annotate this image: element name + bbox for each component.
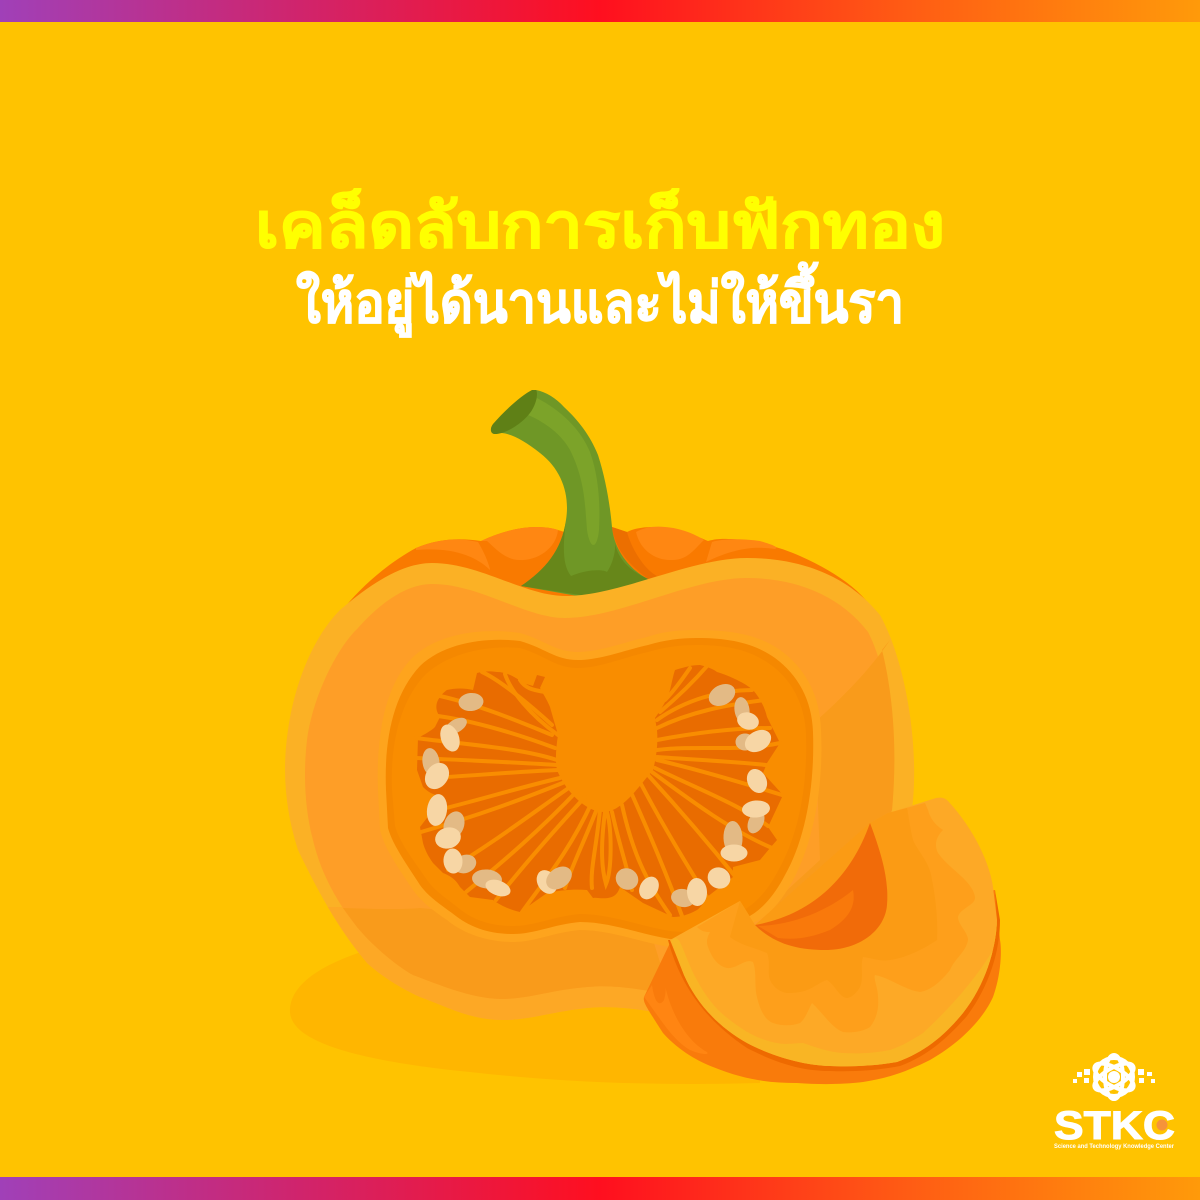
stem base shadow <box>521 520 648 598</box>
stem highlight <box>528 398 599 545</box>
logo: data squares <box>1073 1069 1155 1083</box>
flesh lower shade <box>343 908 670 999</box>
stem cut end <box>491 390 537 434</box>
cavity light ring <box>378 630 821 948</box>
seeds <box>420 680 775 909</box>
logo: orange dot <box>1156 1120 1168 1130</box>
pumpkin slice <box>644 798 1001 1084</box>
slice dark edge <box>668 890 1000 1071</box>
logo: wordmark: STKC <box>1054 1104 1175 1148</box>
slice hollow <box>755 823 887 950</box>
slice skin <box>644 890 1001 1084</box>
pumpkin flesh <box>305 578 894 999</box>
logo: tagline: Science and Technology Knowledge Center <box>1054 1144 1175 1150</box>
bottom gradient bar <box>0 1177 1200 1200</box>
fibres dark mass <box>417 665 783 917</box>
logo: atom emblem <box>1090 1055 1138 1099</box>
stem <box>491 390 648 600</box>
slice top face <box>670 798 997 1066</box>
cavity inner fill <box>392 645 806 932</box>
pumpkin illustration <box>250 390 1001 1084</box>
back lobes <box>340 527 885 640</box>
title <box>255 188 945 338</box>
seed cavity <box>378 630 821 948</box>
pumpkin outer rim lower band <box>328 907 648 1020</box>
top gradient bar <box>0 0 1200 22</box>
ground shadow <box>290 950 760 1084</box>
title line 2: ให้อยู่ได้นานและไม่ให้ขึ้นรา <box>296 262 904 338</box>
logo: STKC <box>1054 1055 1175 1150</box>
slice hollow highlight <box>758 890 854 939</box>
slice inner flesh <box>697 803 975 1032</box>
radial fibres <box>416 665 782 916</box>
slice yellow rim <box>671 920 997 1066</box>
flesh right shade <box>760 640 894 915</box>
pumpkin outer rim <box>285 558 914 1020</box>
slice skin highlight <box>644 985 708 1054</box>
cavity dark ring <box>386 638 813 940</box>
slice inner shade <box>730 808 937 998</box>
title line 1: เคล็ดลับการเก็บฟักทอง <box>255 188 945 261</box>
